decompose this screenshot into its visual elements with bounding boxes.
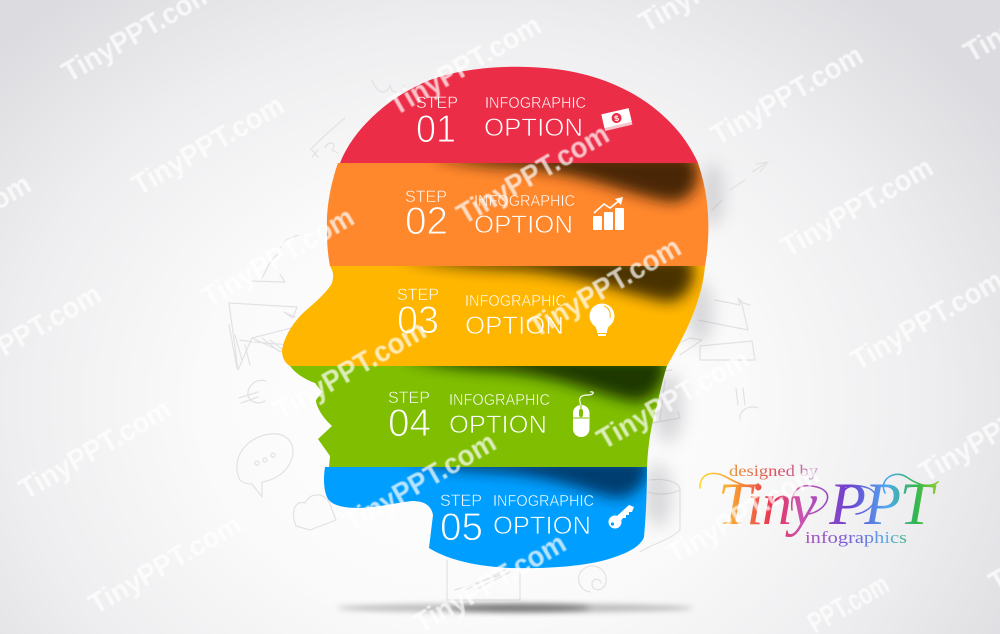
- doodles behind the head: [229, 80, 768, 600]
- band 2: orange: OPTION: [474, 211, 573, 239]
- logo: Tiny PPT script: Tiny PPT: [718, 471, 937, 537]
- band 5: blue: STEP: [440, 491, 482, 510]
- band 1: red: [340, 67, 698, 163]
- watermarks: TinyPPT.com: [592, 343, 755, 456]
- logo: infographics text: infographics: [805, 528, 907, 547]
- watermarks: TinyPPT.com: [452, 118, 615, 231]
- icon: bar chart: [593, 197, 624, 230]
- ground shadow: [337, 604, 693, 612]
- watermarks: TinyPPT.com: [14, 393, 177, 506]
- band 4: green: INFOGRAPHIC: [449, 392, 550, 409]
- band 1: red: STEP: [416, 93, 458, 112]
- icon: mouse: [573, 392, 593, 437]
- band 2: orange: INFOGRAPHIC: [474, 193, 575, 210]
- band 5: blue: OPTION: [493, 512, 591, 540]
- watermarks: TinyPPT.com: [776, 151, 939, 264]
- icon: banknote: $: [613, 114, 620, 123]
- band 5: blue: 05: [440, 506, 483, 549]
- band 1: red: 01: [416, 108, 456, 151]
- logo: designed by text: designed by: [729, 463, 818, 480]
- watermarks: TinyPPT.com: [338, 426, 502, 539]
- band 1: red: OPTION: [484, 114, 583, 142]
- band 2: orange: 02: [405, 200, 448, 243]
- band 3: yellow: 03: [397, 299, 439, 342]
- band 3: yellow: INFOGRAPHIC: [465, 293, 566, 310]
- watermarks: TinyPPT.com: [706, 39, 869, 152]
- band 4: green: OPTION: [449, 411, 547, 439]
- logo swashes: [700, 473, 938, 514]
- band 3: yellow: OPTION: [465, 312, 564, 340]
- watermarks: TinyPPT.com: [84, 508, 247, 621]
- head infographic: [282, 67, 708, 568]
- band 2: orange: [327, 154, 708, 266]
- watermarks: TinyPPT.com: [196, 201, 360, 314]
- band 3: yellow: [282, 257, 705, 366]
- band 4: green: [290, 357, 667, 467]
- band 4: green: STEP: [388, 388, 430, 407]
- watermarks: TinyPPT.com: [662, 458, 825, 571]
- icon: key: [608, 505, 634, 528]
- band 4: green: 04: [388, 402, 431, 445]
- logo: designed by TinyPPT infographics: [700, 463, 938, 547]
- icon: light bulb: [590, 304, 614, 336]
- watermarks: TinyPPT.com: [524, 231, 687, 344]
- band 3: yellow: STEP: [397, 285, 439, 304]
- paper shadows at the right of the head: [644, 163, 724, 527]
- band 1: red: INFOGRAPHIC: [485, 95, 586, 112]
- watermarks: TinyPPT.com: [126, 89, 290, 202]
- watermarks: TinyPPT.com: [268, 314, 432, 427]
- band 5: blue: INFOGRAPHIC: [493, 493, 594, 510]
- band 5: blue: [324, 458, 648, 568]
- band 2: orange: STEP: [405, 187, 447, 206]
- icon: banknote: [601, 108, 632, 131]
- watermarks: TinyPPT.com: [384, 9, 547, 122]
